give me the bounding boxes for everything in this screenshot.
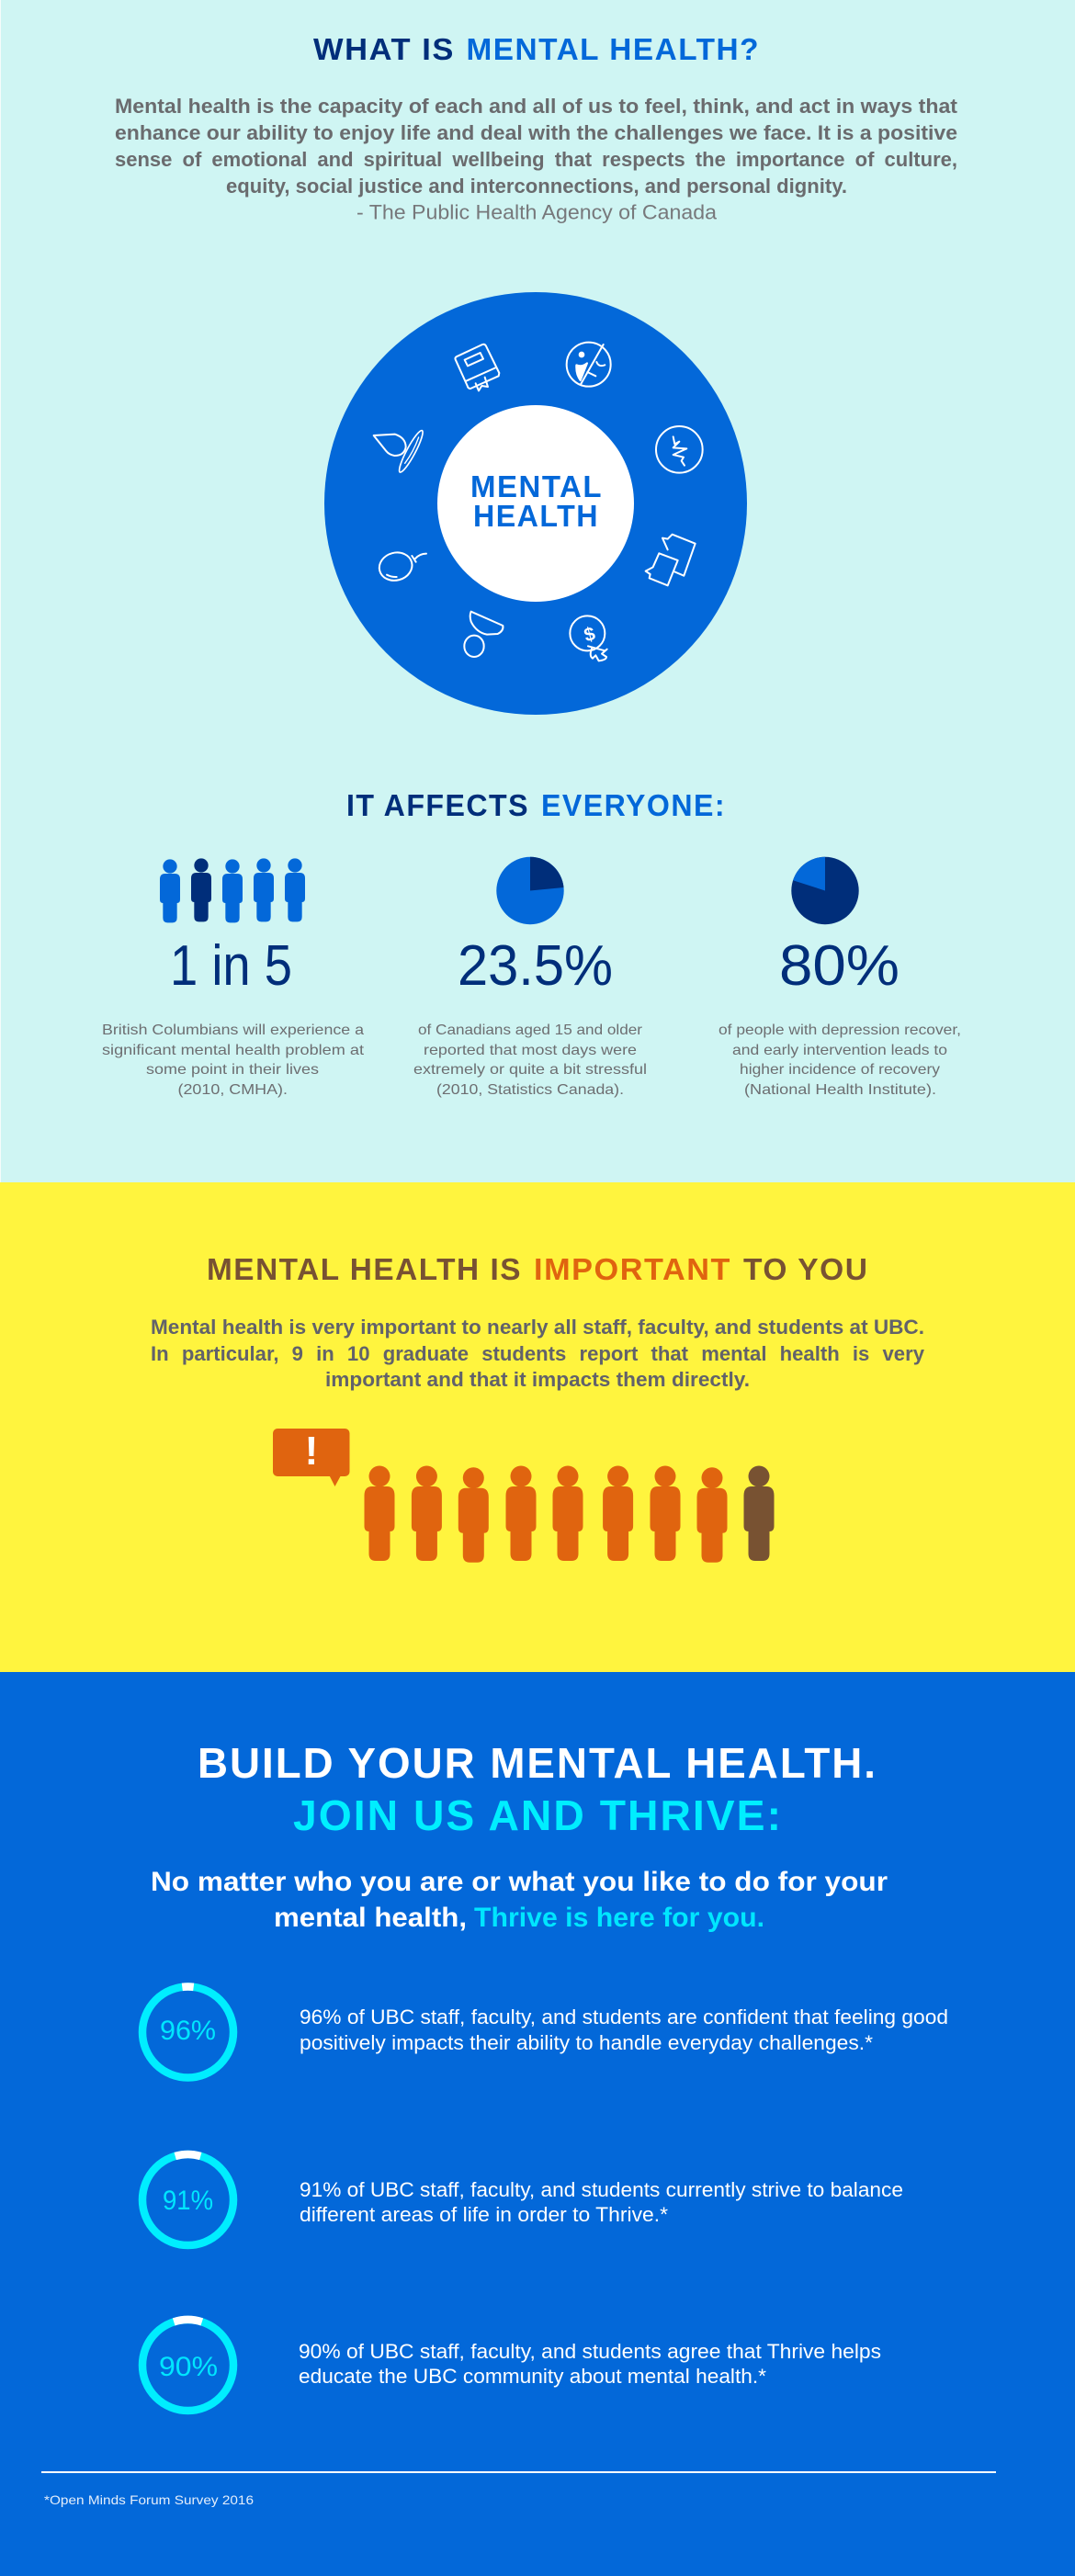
number: 23.5%: 23.5% bbox=[458, 934, 613, 998]
pie chart: 23.5% bbox=[496, 857, 564, 924]
heading: important to you bbox=[207, 1252, 869, 1286]
definition text block: equity, social justice and interconnections, and personal dignity. bbox=[226, 175, 847, 198]
caption: 80%: higher incidence of recovery bbox=[740, 1062, 940, 1078]
icon: circle with zigzag bbox=[656, 426, 703, 473]
ring chart: 90%: 90% bbox=[159, 2352, 218, 2382]
icon: nine in ten people bbox=[364, 1466, 774, 1563]
subheading: thrive is here for you bbox=[151, 1867, 888, 1933]
importance text block bbox=[151, 1316, 925, 1391]
text: 90% statement: educate the UBC community about mental health.* bbox=[299, 2365, 766, 2388]
wheel centre label: HEALTH bbox=[473, 499, 599, 533]
panel: mental health is important to you bbox=[0, 1182, 1075, 1672]
panel: build your mental health bbox=[0, 1672, 1075, 2576]
importance text block: In particular, 9 in 10 graduate students report that mental health is very bbox=[151, 1342, 925, 1365]
caption: 23.5%: reported that most days were bbox=[424, 1043, 637, 1058]
heading: build your mental health, join us and thrive bbox=[198, 1739, 877, 1839]
title: what is mental health: MENTAL HEALTH? bbox=[467, 32, 760, 66]
text: 90% statement bbox=[299, 2340, 881, 2388]
icon: speech bubble with exclamation: ! bbox=[305, 1429, 318, 1474]
caption: 23.5% bbox=[413, 1022, 647, 1098]
text: 90% statement: 90% of UBC staff, faculty, and students agree that Thrive helps bbox=[299, 2340, 881, 2363]
heading: important to you: MENTAL HEALTH IS bbox=[207, 1252, 522, 1286]
stat: 23.5% bbox=[413, 857, 647, 1098]
text: 91% statement: different areas of life in order to Thrive.* bbox=[300, 2203, 668, 2226]
caption: 1 in 5: some point in their lives bbox=[146, 1062, 319, 1078]
text: 91% statement bbox=[300, 2178, 903, 2226]
heading: build your mental health, join us and thrive: BUILD YOUR MENTAL HEALTH. bbox=[198, 1739, 877, 1787]
subheading: thrive is here for you: mental health, bbox=[274, 1903, 467, 1933]
heading: it affects everyone: IT AFFECTS bbox=[346, 788, 529, 822]
subheading: thrive is here for you: No matter who you are or what you like to do for your bbox=[151, 1867, 888, 1897]
stat: 1 in 5 bbox=[102, 858, 365, 1098]
caption: 80%: and early intervention leads to bbox=[732, 1043, 947, 1058]
caption: 23.5%: extremely or quite a bit stressful bbox=[413, 1062, 647, 1078]
footnote: *Open Minds Forum Survey 2016 bbox=[44, 2492, 254, 2507]
definition text block: sense of emotional and spiritual wellbeing that respects the importance of culture, bbox=[115, 148, 957, 171]
ring chart: 96%: 96% bbox=[160, 2016, 216, 2046]
title: what is mental health: WHAT IS bbox=[313, 32, 455, 66]
wheel centre label bbox=[470, 469, 603, 533]
icon: money bag bbox=[570, 616, 607, 661]
number: 80%: 80% bbox=[779, 934, 900, 998]
icon: money bag: $ bbox=[582, 623, 598, 646]
heading: important to you: IMPORTANT bbox=[534, 1252, 731, 1286]
caption: 23.5%: (2010, Statistics Canada). bbox=[436, 1082, 624, 1098]
caption: 80%: of people with depression recover, bbox=[719, 1022, 961, 1038]
title: what is mental health bbox=[313, 32, 760, 66]
caption: 23.5%: of Canadians aged 15 and older bbox=[418, 1022, 643, 1038]
stat: 90% bbox=[142, 2320, 881, 2411]
icon: five people, one highlighted bbox=[160, 858, 305, 922]
panel: what is mental health bbox=[0, 0, 1075, 1182]
heading: build your mental health, join us and thrive: JOIN US AND THRIVE: bbox=[293, 1791, 783, 1839]
definition text block: - The Public Health Agency of Canada bbox=[356, 200, 718, 224]
pie chart: 80% bbox=[791, 857, 859, 924]
subheading: thrive is here for you: Thrive is here for you. bbox=[474, 1903, 764, 1933]
text: 96% statement: positively impacts their ability to handle everyday challenges.* bbox=[300, 2031, 873, 2054]
heading: it affects everyone: EVERYONE: bbox=[541, 788, 726, 822]
icon: overlapping papers bbox=[646, 535, 696, 585]
text: 96% statement bbox=[300, 2005, 948, 2054]
caption: 80%: (National Health Institute). bbox=[744, 1082, 936, 1098]
importance text block: important and that it impacts them directly. bbox=[325, 1368, 750, 1391]
text: 96% statement: 96% of UBC staff, faculty, and students are confident that feeling good bbox=[300, 2005, 948, 2028]
ring chart: 91%: 91% bbox=[163, 2186, 213, 2216]
ring chart: 90% bbox=[142, 2320, 233, 2411]
wheel centre label: MENTAL bbox=[470, 469, 603, 503]
definition text block bbox=[115, 95, 958, 224]
stat: 80% bbox=[719, 857, 961, 1098]
caption: 1 in 5: British Columbians will experience a bbox=[102, 1022, 364, 1038]
caption: 1 in 5 bbox=[102, 1022, 365, 1098]
diagram: mental health wheel bbox=[324, 292, 747, 715]
heading: important to you: TO YOU bbox=[743, 1252, 869, 1286]
importance text block: Mental health is very important to nearly all staff, faculty, and students at UBC. bbox=[151, 1316, 924, 1339]
stat: 96% bbox=[142, 1986, 948, 2078]
definition text block: enhance our ability to enjoy life and deal with the challenges we face. It is a positive bbox=[115, 121, 957, 144]
icon: balloon bbox=[376, 549, 426, 584]
icon: bowl and ball bbox=[464, 612, 503, 657]
ring chart: 91% bbox=[142, 2154, 233, 2245]
caption: 1 in 5: significant mental health problem at bbox=[102, 1043, 365, 1058]
text: 91% statement: 91% of UBC staff, faculty, and students currently strive to balance bbox=[300, 2178, 903, 2201]
icon: book bbox=[455, 345, 499, 390]
icon: drop and paperclip bbox=[374, 428, 426, 474]
caption: 1 in 5: (2010, CMHA). bbox=[178, 1082, 288, 1098]
icon: speech bubble with exclamation bbox=[273, 1429, 349, 1486]
number: 1 in 5: 1 in 5 bbox=[170, 934, 292, 998]
heading: it affects everyone bbox=[346, 788, 726, 822]
stat: 91% bbox=[142, 2154, 903, 2245]
icon: face with diagonal split bbox=[567, 343, 611, 387]
caption: 80% bbox=[719, 1022, 961, 1098]
ring chart: 96% bbox=[142, 1986, 233, 2078]
definition text block: Mental health is the capacity of each and all of us to feel, think, and act in ways that bbox=[115, 95, 958, 118]
